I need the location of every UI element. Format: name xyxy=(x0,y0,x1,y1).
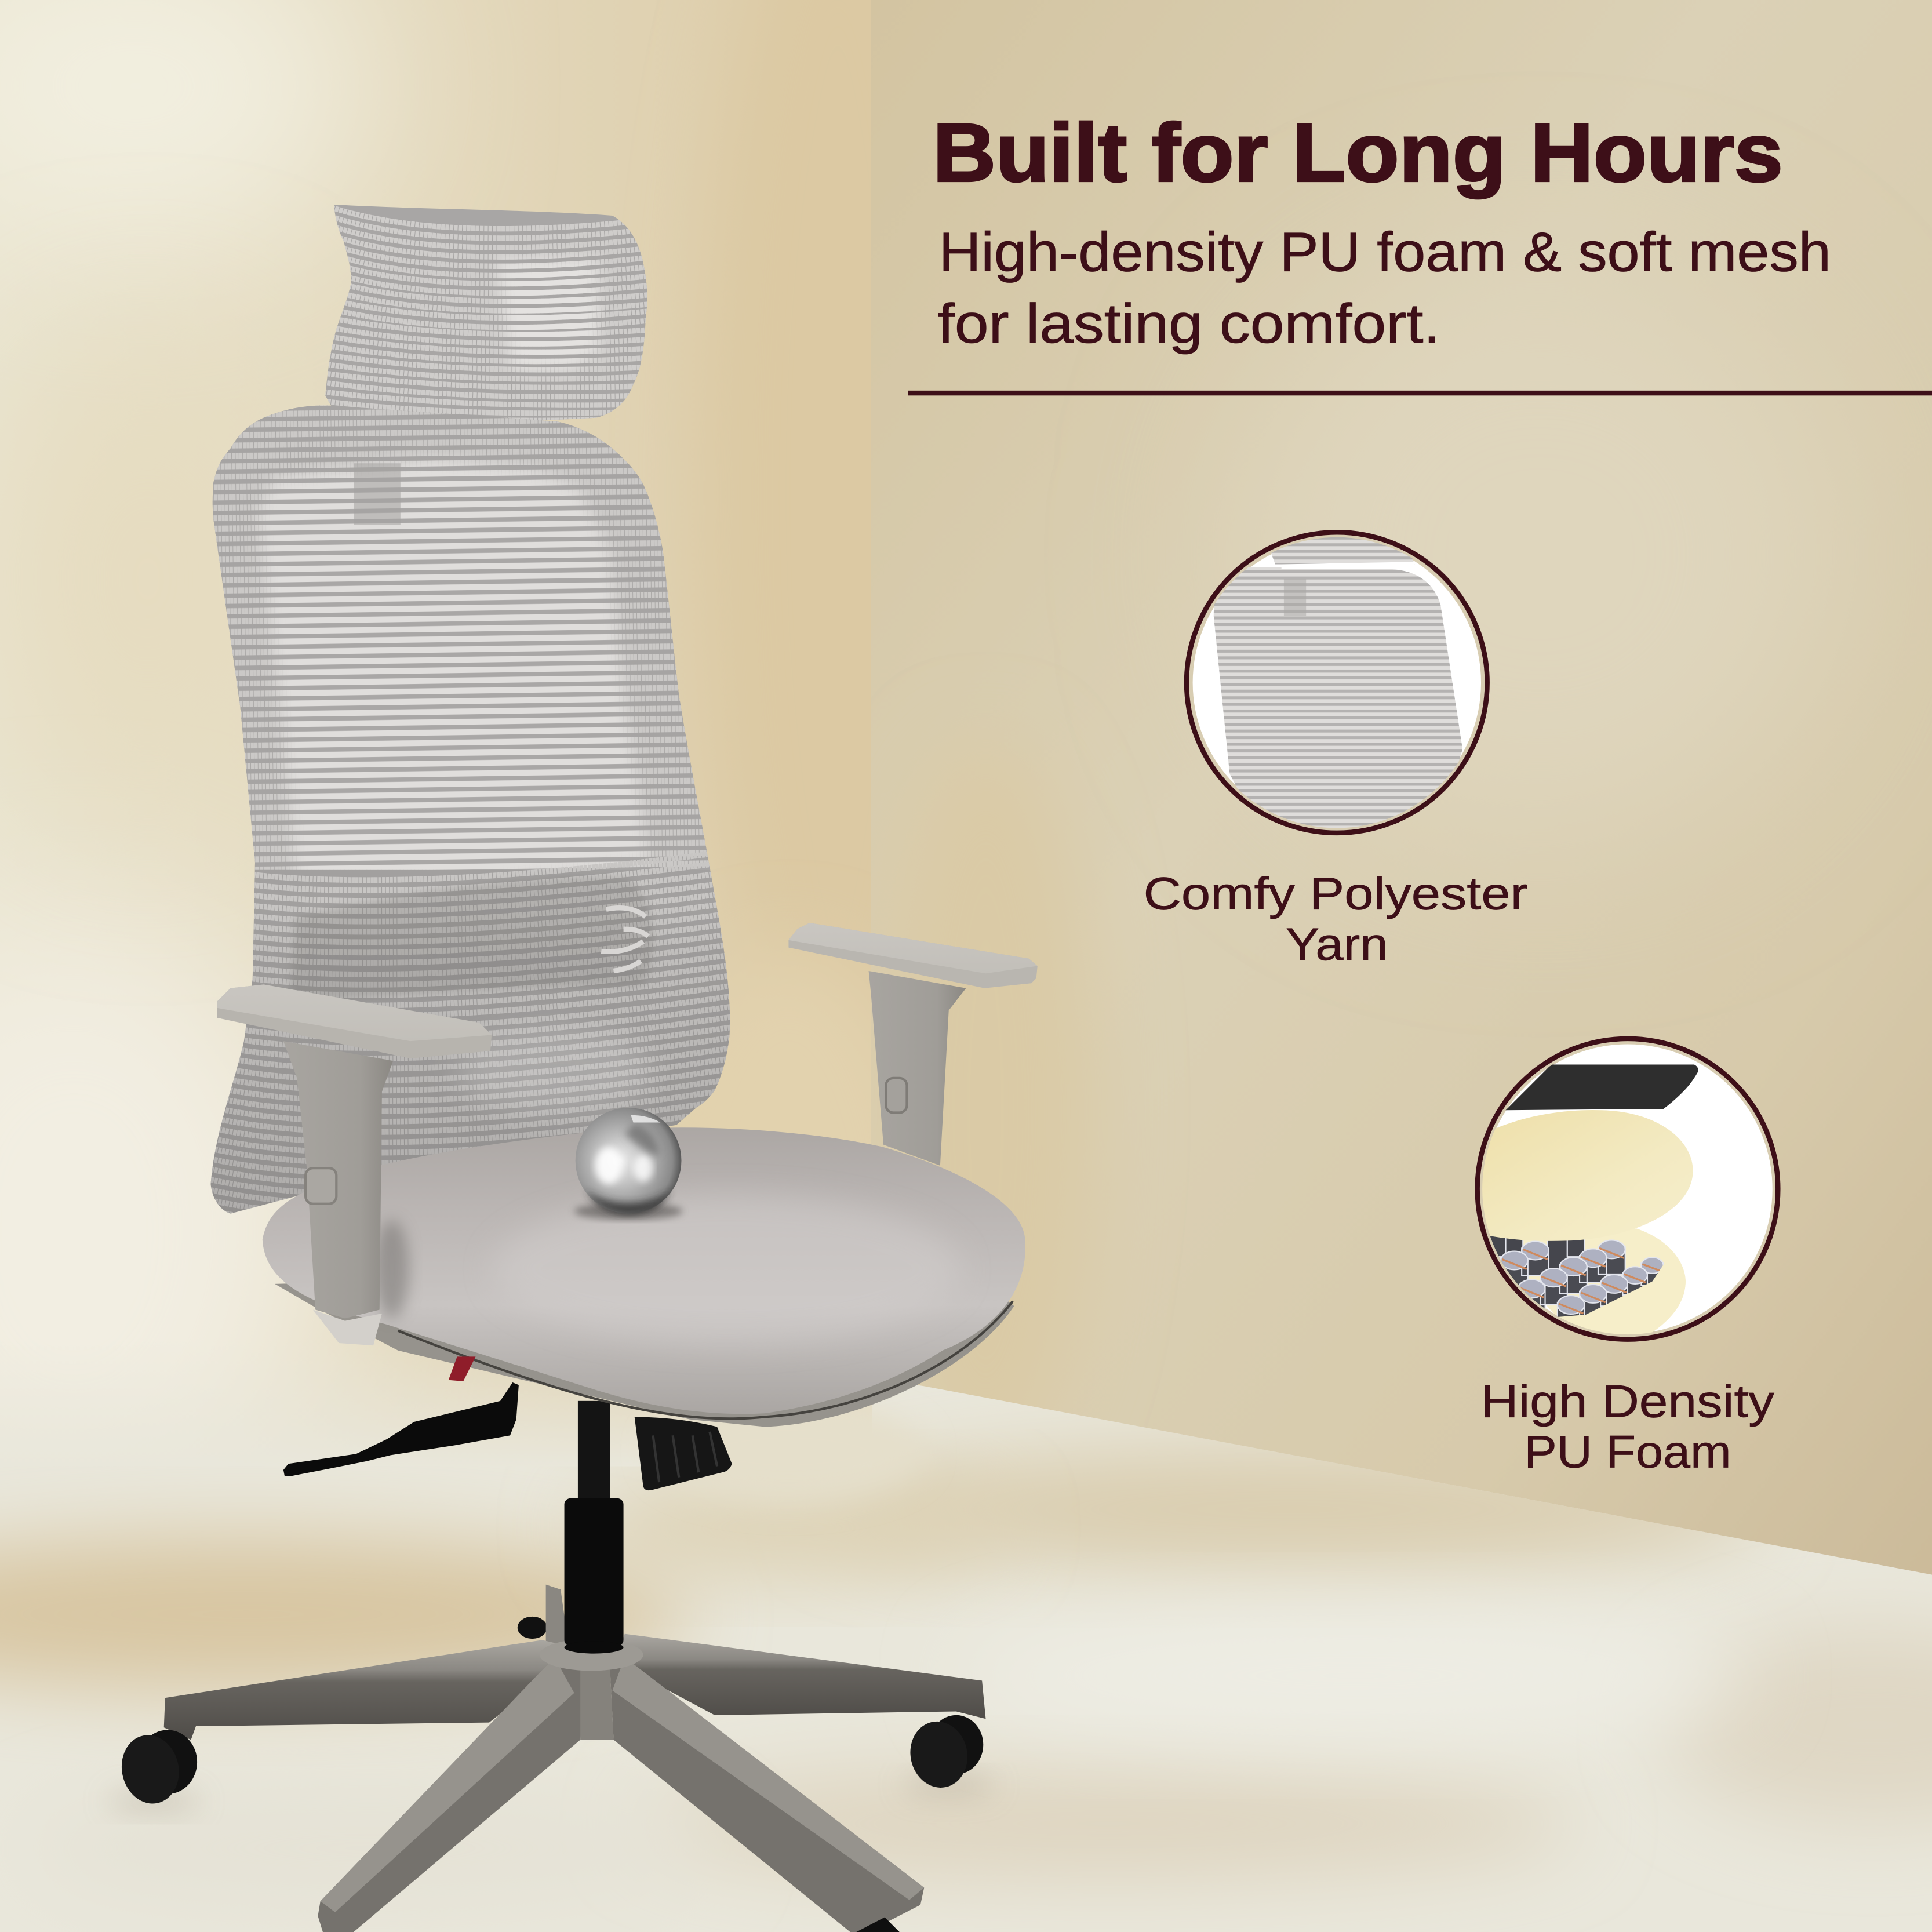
right armrest xyxy=(788,923,1038,1166)
label: high density pu foam xyxy=(1481,1376,1775,1478)
label: comfy polyester yarn: Yarn xyxy=(1286,919,1388,970)
coil copper streaks xyxy=(1502,1248,1662,1314)
mesh backrest xyxy=(185,394,752,1238)
spring coils xyxy=(1489,1232,1664,1327)
front left leg xyxy=(318,1657,584,1932)
chair base xyxy=(107,1382,996,1932)
rear leg and caster xyxy=(518,1585,569,1651)
stem shadow on seat xyxy=(374,1220,409,1318)
curved lower mesh stripes xyxy=(203,850,739,1235)
lumbar highlight xyxy=(601,908,648,971)
divider line xyxy=(908,391,1932,395)
label: comfy polyester yarn: Comfy Polyester xyxy=(1144,868,1528,919)
detail circle: high density foam xyxy=(1472,1039,1778,1343)
hub xyxy=(540,1639,643,1740)
gas lift column xyxy=(565,1401,624,1654)
lever xyxy=(283,1382,519,1476)
tension knob xyxy=(635,1417,732,1490)
lower glow xyxy=(456,1028,653,1116)
floor shadows xyxy=(107,1778,996,1809)
lower foam lip xyxy=(1540,1254,1686,1343)
title: Built for Long Hours xyxy=(933,107,1783,199)
chrome ball xyxy=(574,1108,683,1220)
black fabric layer xyxy=(1506,1065,1698,1110)
subtitle: High-density PU foam & soft mesh xyxy=(939,221,1831,283)
left leg xyxy=(164,1640,589,1740)
subtitle: for lasting comfort. xyxy=(938,293,1440,355)
upper tab xyxy=(354,463,401,525)
headrest xyxy=(321,197,656,425)
lower foam layer xyxy=(1485,1228,1686,1332)
casters xyxy=(115,1715,983,1932)
label: high density pu foam: High Density xyxy=(1481,1376,1775,1427)
label: comfy polyester yarn xyxy=(1144,868,1528,970)
front right leg xyxy=(610,1657,924,1932)
upper foam layer xyxy=(1472,1110,1693,1241)
detail circle: polyester yarn mesh xyxy=(1187,532,1487,838)
seat cushion xyxy=(263,1127,1025,1427)
chair xyxy=(107,197,1038,1932)
left armrest xyxy=(217,984,492,1345)
lumbar support xyxy=(290,876,653,1004)
subtitle xyxy=(938,221,1831,355)
red lever tab xyxy=(449,1356,475,1381)
label: high density pu foam: PU Foam xyxy=(1524,1427,1731,1478)
right leg xyxy=(616,1634,986,1719)
